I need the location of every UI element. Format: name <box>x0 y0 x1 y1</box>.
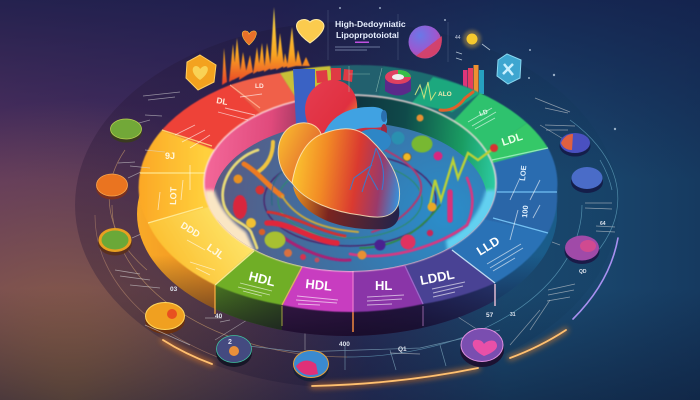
heart shadow base <box>293 186 399 229</box>
icon: golden heart <box>297 19 324 43</box>
segment: green ALO panel <box>412 77 480 112</box>
coin: orange <box>96 174 128 200</box>
outer dial disc with tick lines <box>75 22 619 388</box>
label: DDD yellow: DDD <box>178 220 202 241</box>
segment: amber LOT <box>139 173 220 223</box>
segment: dark teal top <box>330 65 383 115</box>
label: LDDL indigo: LDDL <box>419 267 456 288</box>
ring segments <box>139 65 557 312</box>
segment: amber 9J <box>140 130 228 173</box>
dial label: Q1: Q1 <box>398 346 407 353</box>
coin: bottom-left yellow <box>145 302 185 334</box>
blue arch <box>322 107 387 142</box>
dial label: 57: 57 <box>486 312 494 319</box>
icon: blue hexagon with cross <box>497 54 521 84</box>
floor balls <box>233 114 498 262</box>
coin: dark orange <box>216 336 252 367</box>
title: Lipoprpotoiotal <box>336 30 399 40</box>
ring outer wall <box>137 92 557 336</box>
label: HDL magenta: HDL <box>305 276 333 294</box>
dial label: 40: 40 <box>215 313 223 320</box>
icon: pie sphere <box>408 26 442 58</box>
segment: teal ALO <box>375 66 480 130</box>
coin: green <box>110 119 142 142</box>
small teal chart panel lines <box>349 66 382 92</box>
bar chart top right <box>463 65 484 94</box>
label: LDL green: LDL <box>500 131 525 149</box>
segment: yellow LJL <box>148 205 260 285</box>
inner well <box>204 95 496 271</box>
right atrium <box>355 129 391 153</box>
rainbow tube on ALO panel <box>440 92 473 110</box>
dial small text lines <box>115 92 615 354</box>
heart illustration <box>278 68 400 229</box>
well floor <box>204 122 496 278</box>
title: High-Dedoyniatic <box>335 19 406 29</box>
label: DL red: DL <box>216 95 229 107</box>
segment: magenta HDL <box>282 260 353 312</box>
label: HDL green: HDL <box>247 268 277 289</box>
donut chart <box>385 70 411 96</box>
segment: blue LOE <box>485 148 557 192</box>
dial labels <box>170 221 606 353</box>
label: 9J amber: 9J <box>165 151 175 161</box>
segment: blue LLD <box>445 218 548 283</box>
left atrium <box>278 123 322 183</box>
floor squiggle tubes <box>223 142 494 260</box>
coin: blue <box>571 167 603 193</box>
title underline and subtext lines <box>335 42 380 50</box>
label: LJL yellow: LJL <box>204 242 227 263</box>
coin: yellow-green <box>98 228 132 256</box>
heartbeat trace <box>415 82 436 100</box>
label: 100 blue: 100 <box>520 205 530 218</box>
dial label: 400: 400 <box>339 341 350 348</box>
segment: red DL <box>162 85 272 155</box>
icon: small heart <box>242 31 256 45</box>
segment: indigo LDDL <box>402 245 495 304</box>
pulmonary vessel <box>293 69 315 124</box>
segment: green LDL <box>480 123 548 165</box>
coronary veins <box>350 148 384 192</box>
segment body text lines <box>158 94 540 305</box>
top-left spike bar chart <box>222 7 310 85</box>
label: LOT amber: LOT <box>168 186 179 205</box>
coin: dark orange: 2 <box>228 339 232 346</box>
icon: sun with small labels <box>455 30 490 60</box>
aorta arch <box>305 68 357 140</box>
segment: coral LD <box>230 73 305 125</box>
segment: green HDL <box>215 245 305 305</box>
icon: orange hexagon with heart <box>186 55 216 90</box>
label: HL purple: HL <box>375 278 392 293</box>
coin: pink purple <box>564 236 600 264</box>
segment labels <box>165 83 530 294</box>
coin: pink purple large <box>460 328 504 367</box>
label: LOE blue: LOE <box>518 165 528 181</box>
coin: blue orange <box>560 133 590 156</box>
main ventricle <box>292 129 400 217</box>
icon: sun with small labels: 44 <box>455 35 461 41</box>
label: LD coral: LD <box>255 83 264 90</box>
segment divider glows <box>140 85 557 312</box>
stars <box>339 7 616 130</box>
segment: green LD <box>445 93 527 155</box>
segment: blue 100 <box>480 192 557 233</box>
decorative panel rules <box>328 10 448 62</box>
dial label: QD: QD <box>579 269 587 275</box>
title <box>335 19 406 40</box>
label: LD green: LD <box>478 108 489 118</box>
label: ALO teal: ALO <box>438 91 452 98</box>
glowing rim arcs <box>163 238 618 386</box>
dial label: 03: 03 <box>170 286 178 293</box>
coin: blue red <box>293 350 329 382</box>
dial label: 64: 64 <box>600 221 606 227</box>
segment: yellow-green <box>280 66 340 115</box>
dial label: 31 right: 31 <box>510 312 516 318</box>
data coins <box>96 119 603 382</box>
segment: purple HL <box>353 258 423 312</box>
label: LLD blue: LLD <box>474 234 502 259</box>
